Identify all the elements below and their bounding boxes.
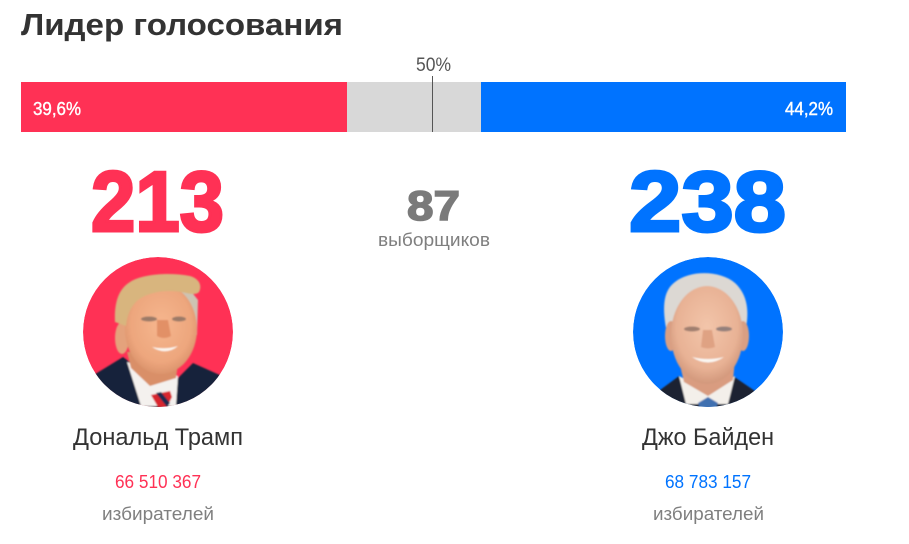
title: Лидер голосования: [21, 7, 343, 42]
Biden voters caption: избирателей: [653, 504, 764, 524]
Trump popular votes: 66 510 367: [115, 472, 201, 492]
Trump name: Дональд Трамп: [73, 424, 243, 451]
Biden electoral votes: 238: [629, 155, 786, 250]
Biden popular votes: 68 783 157: [665, 472, 751, 492]
undecided electoral votes: 87: [407, 182, 460, 229]
icon: Trump portrait: [83, 257, 233, 410]
Trump vote share: 39,6%: [33, 99, 81, 119]
undecided electors caption: выборщиков: [378, 230, 490, 250]
50 percent marker label: 50%: [416, 55, 451, 76]
progress bar: vote share: [21, 76, 846, 132]
Trump electoral votes: 213: [91, 155, 224, 250]
Biden vote share: 44,2%: [785, 99, 833, 119]
icon: Biden portrait: [633, 257, 783, 410]
Trump voters caption: избирателей: [102, 504, 214, 524]
Biden name: Джо Байден: [642, 424, 774, 451]
